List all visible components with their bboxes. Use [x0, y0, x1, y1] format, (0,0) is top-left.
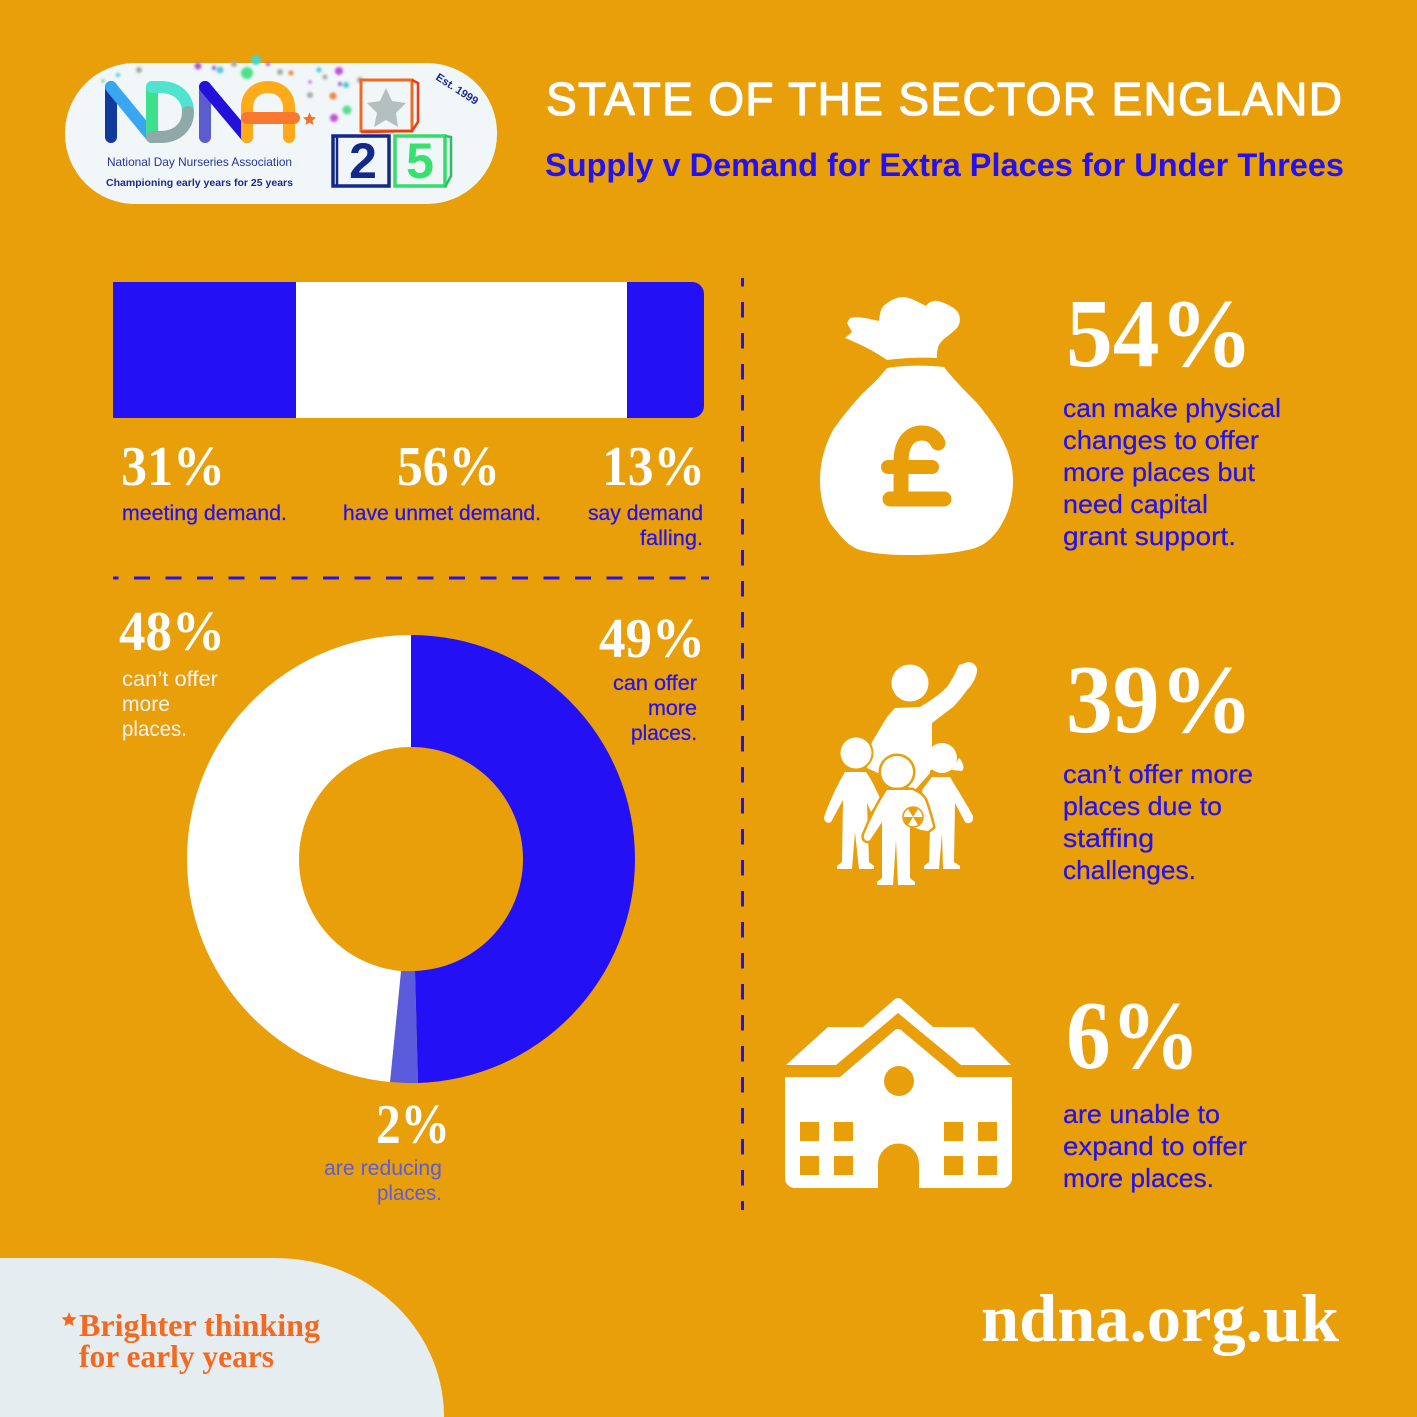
stacked bar chart — [113, 282, 704, 418]
stat: 49% can offer — [599, 608, 705, 745]
stat: 39% staffing: can’t offer more — [1063, 759, 1253, 789]
child centre — [864, 756, 933, 885]
stat: 6% unable to expand — [1063, 982, 1247, 1193]
child left — [824, 738, 880, 869]
stat: 39% staffing: places due to — [1063, 791, 1222, 821]
stat: 13% demand falling: 13% — [602, 436, 705, 498]
stat: 39% staffing: 39% — [1066, 646, 1253, 754]
stat: 54% capital grant: changes to offer — [1063, 425, 1259, 455]
stat: 54% capital grant: 54% — [1066, 280, 1253, 388]
logo strapline: Championing early years for 25 years — [106, 178, 293, 189]
stat: 6% unable to expand: 6% — [1066, 982, 1200, 1090]
block: star — [361, 80, 418, 132]
logo association name: National Day Nurseries Association — [107, 155, 292, 169]
stat: 56% unmet demand: have unmet demand. — [343, 502, 541, 525]
logo letters NDNA — [111, 87, 294, 137]
title: STATE OF THE SECTOR ENGLAND — [546, 73, 1342, 125]
logo pill — [65, 63, 497, 204]
footer star — [62, 1312, 76, 1326]
stat: 54% capital grant — [1063, 280, 1281, 551]
stat: 54% capital grant: need capital — [1063, 489, 1208, 519]
footer strapline panel — [0, 1258, 444, 1417]
strapline: Brighter thinking — [79, 1307, 320, 1343]
est. 1999: Est. 1999 — [433, 71, 480, 108]
stat: 48% can't offer: 48% — [119, 601, 225, 663]
stat: 13% demand falling: say demand — [588, 502, 703, 525]
website: ndna.org.uk — [981, 1280, 1339, 1356]
strapline line two: for early years — [79, 1338, 274, 1374]
stat: 49% can offer: 49% — [599, 608, 705, 670]
stat: 2% reducing: are reducing — [324, 1157, 442, 1180]
sparkles — [102, 55, 363, 122]
segment: reducing — [390, 971, 418, 1083]
child right — [921, 743, 973, 869]
logo badge — [65, 55, 497, 204]
stat: 13% demand falling — [588, 436, 705, 550]
stat: 31% meeting demand: meeting demand. — [122, 502, 287, 525]
stat: 31% meeting demand: 31% — [121, 436, 225, 498]
stat: 31% meeting demand — [121, 436, 287, 525]
adult — [867, 662, 977, 790]
icon: adult and children — [824, 662, 977, 885]
block: number 5: 5 — [406, 133, 434, 189]
block: number 2: 2 — [349, 133, 377, 189]
stat: 48% can't offer: can’t offer — [122, 668, 218, 691]
stat: 54% capital grant: can make physical — [1063, 393, 1281, 423]
stat: 49% can offer: places. — [631, 722, 697, 745]
logo star — [303, 112, 316, 125]
stat: 2% reducing: 2% — [376, 1094, 450, 1156]
stat: 6% unable to expand: more places. — [1063, 1163, 1214, 1193]
radiation badge — [903, 807, 923, 827]
stat: 2% reducing — [324, 1094, 450, 1205]
stat: 48% can't offer: places. — [122, 718, 187, 741]
stat: 56% unmet demand — [343, 436, 541, 525]
subtitle: Supply v Demand for Extra Places for Under Threes — [545, 147, 1344, 183]
block: number 2 — [333, 133, 389, 189]
stat: 54% capital grant: more places but — [1063, 457, 1256, 487]
stat: 6% unable to expand: expand to offer — [1063, 1131, 1247, 1161]
stat: 39% staffing: challenges. — [1063, 855, 1196, 885]
stat: 13% demand falling: falling. — [640, 527, 703, 550]
stat: 48% can't offer — [119, 601, 225, 741]
segment: can offer more — [411, 635, 635, 1083]
stat: 49% can offer: more — [648, 697, 697, 720]
stat: 49% can offer: can offer — [613, 672, 697, 695]
roof — [786, 998, 1011, 1065]
stat: 39% staffing — [1063, 646, 1253, 885]
donut chart — [187, 635, 635, 1083]
stat: 2% reducing: places. — [377, 1182, 442, 1205]
segment: can't offer — [187, 635, 411, 1082]
icon: nursery building — [785, 998, 1012, 1188]
block: number 5 — [395, 133, 451, 189]
pound sign — [888, 433, 944, 499]
icon: money bag — [820, 297, 1013, 555]
stat: 6% unable to expand: are unable to — [1063, 1099, 1220, 1129]
stat: 39% staffing: staffing — [1063, 823, 1154, 853]
stat: 54% capital grant: grant support. — [1063, 521, 1236, 551]
building body — [785, 1029, 1012, 1188]
stat: 56% unmet demand: 56% — [397, 436, 500, 498]
windows — [800, 1066, 997, 1175]
stat: 48% can't offer: more — [122, 693, 170, 716]
